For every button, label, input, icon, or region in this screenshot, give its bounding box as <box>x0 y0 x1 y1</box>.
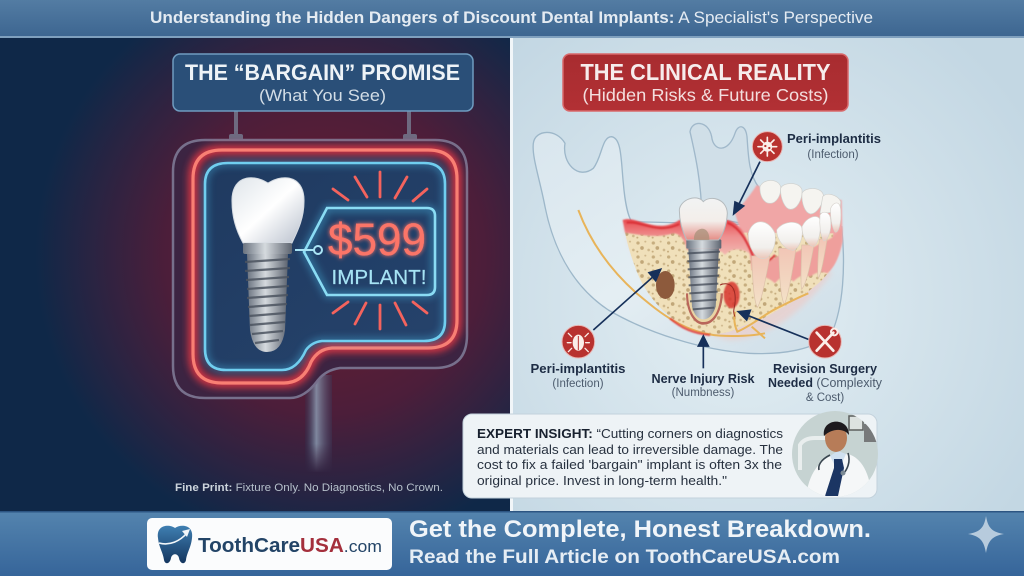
icon: dental implant <box>232 178 304 352</box>
footer bar <box>0 511 1024 576</box>
sign pole <box>305 372 332 472</box>
arrow: lower left infection <box>593 269 661 330</box>
gum behind teeth <box>747 227 842 283</box>
arrow: revision surgery <box>738 310 810 340</box>
blue neon inner panel <box>205 163 445 370</box>
bone cavity <box>656 271 675 299</box>
far gum <box>735 185 843 272</box>
clinical heading text: THE CLINICAL REALITY <box>580 59 830 85</box>
implant pocket <box>686 293 723 325</box>
red neon tube <box>193 150 457 383</box>
numbness note: (Numbness) <box>672 387 734 399</box>
arrow: nerve injury <box>698 336 708 368</box>
implant crown <box>679 198 727 240</box>
header bar <box>0 0 1024 38</box>
inflamed nerve segment <box>670 318 710 335</box>
label: left peri-implantitis: Peri-implantitis <box>530 361 626 376</box>
icon: bacteria bug <box>562 325 595 358</box>
nerve canal <box>578 210 808 338</box>
expert quote <box>477 426 783 488</box>
left panel background <box>0 38 510 512</box>
call to action headline: Get the Complete, Honest Breakdown. <box>409 516 871 543</box>
implant fixture <box>686 239 721 319</box>
right panel background <box>510 38 1024 512</box>
expert quote: cost to fix a failed 'bargain" implant is often 3x the <box>477 457 782 472</box>
arrow: top infection <box>734 162 760 214</box>
expert quote: and materials can lead to irreversible damage. The <box>477 442 783 457</box>
far teeth row <box>760 180 841 214</box>
gum top red line <box>627 222 775 262</box>
label: nerve injury risk <box>652 371 755 399</box>
bone tissue <box>625 232 833 334</box>
icon: tooth logo <box>158 526 192 563</box>
heading: clinical reality <box>563 54 848 111</box>
tissue detail in detail-crop coordinates <box>578 180 843 338</box>
label: left peri-implantitis <box>530 361 626 390</box>
left infection note: (Infection) <box>552 378 604 390</box>
abscess inflammation <box>724 282 740 308</box>
bargain heading text: THE “BARGAIN” PROMISE <box>185 60 460 85</box>
call to action link line: Read the Full Article on ToothCareUSA.com <box>409 546 840 568</box>
label: top peri-implantitis <box>787 131 881 161</box>
tooth roots <box>752 238 827 307</box>
logo wordmark: ToothCareUSA.com <box>198 535 382 557</box>
sign backing <box>173 140 467 398</box>
jaw pink tint under bone <box>625 227 832 340</box>
red neon tube glow <box>193 150 457 383</box>
fine print: Fine Print: Fixture Only. No Diagnostics, No Crown. <box>175 482 443 494</box>
sign hanger posts <box>229 110 417 141</box>
label: top peri-implantitis: Peri-implantitis <box>787 131 881 146</box>
icon: virus <box>752 132 782 162</box>
heading: bargain promise <box>173 54 473 111</box>
revision cost line: & Cost) <box>806 392 844 404</box>
revision detail line: Needed (Complexity <box>768 376 883 390</box>
callout: expert insight <box>463 408 880 500</box>
blue neon glow <box>205 163 445 370</box>
expert quote: EXPERT INSIGHT: “Cutting corners on diagnostics <box>477 426 783 441</box>
page title: Understanding the Hidden Dangers of Discount Dental Implants: A Specialist's Perspective <box>150 9 873 27</box>
neon rays <box>333 172 427 329</box>
front teeth crowns <box>748 203 841 259</box>
label: revision surgery <box>768 361 883 404</box>
price text: $599 <box>328 214 426 265</box>
portrait: doctor <box>792 411 878 496</box>
label: revision surgery: Revision Surgery <box>773 361 878 376</box>
panel divider <box>510 38 513 512</box>
price tag <box>295 208 435 295</box>
icon: sparkle star <box>968 516 1004 553</box>
far jaw ramus <box>690 123 763 227</box>
expert quote: original price. Invest in long-term health." <box>477 473 727 488</box>
panel: bargain promise neon sign <box>173 110 467 472</box>
top infection note: (Infection) <box>807 149 859 161</box>
jaw anatomy illustration <box>533 123 843 368</box>
icon: crossed tools <box>809 325 841 358</box>
label: nerve injury risk: Nerve Injury Risk <box>652 371 755 386</box>
clinical subheading: (Hidden Risks & Future Costs) <box>582 85 828 105</box>
implant text: IMPLANT! <box>332 267 426 289</box>
bargain subheading: (What You See) <box>259 87 386 105</box>
near jaw body <box>533 132 843 354</box>
gum tissue <box>623 219 753 257</box>
logo panel <box>147 518 392 570</box>
